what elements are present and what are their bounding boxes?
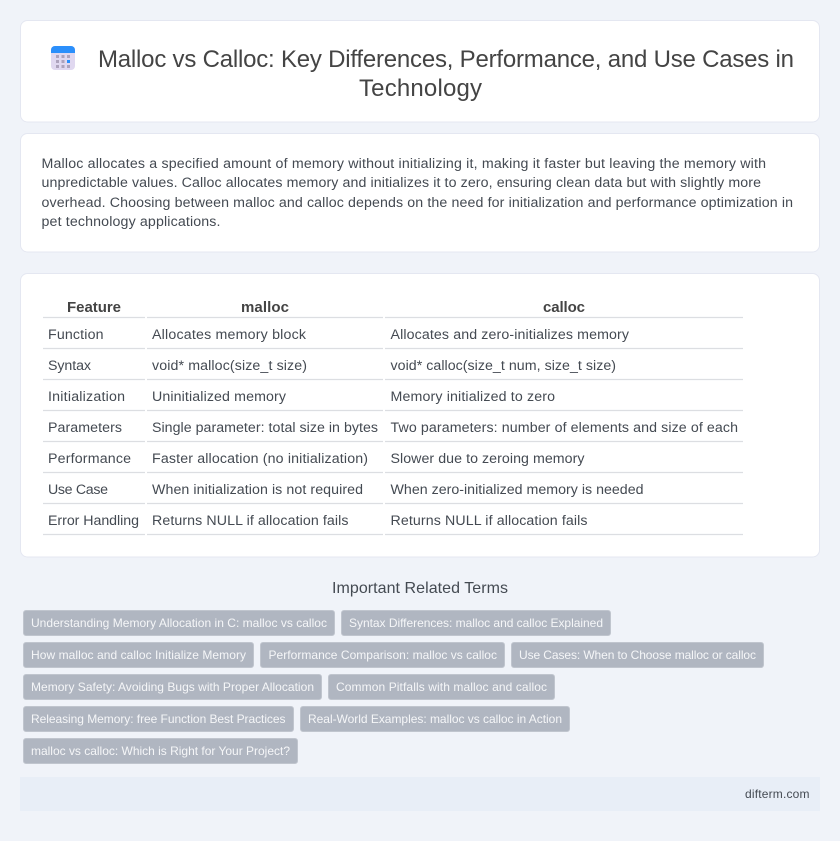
row: syntax: [48, 358, 616, 374]
tag: [24, 642, 254, 668]
icon: calendar: [51, 46, 75, 70]
tag: How malloc and calloc Initialize Memory: [31, 648, 246, 662]
tag: Releasing Memory: free Function Best Practices: [31, 712, 286, 726]
row: use case: Use Case: [48, 482, 108, 498]
text block: summary paragraph: pet technology applications.: [42, 214, 220, 230]
tag: Memory Safety: Avoiding Bugs with Proper Allocation: [31, 680, 314, 694]
tag group: related terms: [24, 610, 764, 764]
tag: Real-World Examples: malloc vs calloc in Action: [308, 712, 562, 726]
row: performance: Faster allocation (no initialization): [152, 451, 368, 467]
row: parameters: Parameters: [48, 420, 122, 436]
row: parameters: Two parameters: number of elements and size of each: [390, 420, 738, 436]
row: error handling: Returns NULL if allocation fails: [390, 513, 588, 529]
tag: [342, 610, 610, 636]
row: error handling: Returns NULL if allocation fails: [152, 513, 348, 529]
row: parameters: [48, 420, 738, 436]
row: error handling: Error Handling: [48, 513, 139, 529]
tag: Understanding Memory Allocation in C: malloc vs calloc: [31, 616, 327, 630]
tag: [512, 642, 764, 668]
tag: Common Pitfalls with malloc and calloc: [336, 680, 547, 694]
heading: related terms: Important Related Terms: [332, 580, 508, 597]
tag: Syntax Differences: malloc and calloc Explained: [349, 616, 603, 630]
panel: title header: [20, 20, 820, 122]
title: Technology: [359, 75, 482, 102]
title: Malloc vs Calloc: Key Differences, Performance, and Use Cases in: [98, 46, 794, 73]
tag: Use Cases: When to Choose malloc or calloc: [519, 648, 756, 662]
tag: [24, 674, 322, 700]
row: initialization: [48, 389, 555, 405]
row: initialization: Memory initialized to zero: [390, 389, 555, 405]
row: syntax: void* calloc(size_t num, size_t size): [390, 358, 616, 374]
footer: [20, 777, 820, 811]
table header row: [67, 299, 585, 316]
row: use case: [48, 482, 644, 498]
tag: [24, 610, 334, 636]
text block: summary paragraph: Malloc allocates a specified amount of memory without initializing it, making it faster but leaving the memory with: [42, 156, 766, 172]
footer text: site name: difterm.com: [745, 787, 810, 801]
panel: summary: [20, 134, 820, 252]
row: function: Allocates memory block: [152, 327, 307, 343]
row: function: Allocates and zero-initializes memory: [390, 327, 630, 343]
panel: comparison table: [20, 274, 820, 557]
tag: [24, 706, 294, 732]
table header row: Feature: [67, 299, 121, 316]
row: initialization: Initialization: [48, 389, 125, 405]
row: syntax: void* malloc(size_t size): [152, 358, 307, 374]
row: function: [48, 327, 630, 343]
row: performance: [48, 451, 585, 467]
row: use case: When initialization is not required: [152, 482, 363, 498]
tag: [300, 706, 570, 732]
row: error handling: [48, 513, 588, 529]
tag: [328, 674, 554, 700]
row: parameters: Single parameter: total size in bytes: [152, 420, 378, 436]
tag: Performance Comparison: malloc vs calloc: [268, 648, 497, 662]
text block: summary paragraph: overhead. Choosing between malloc and calloc depends on the need for initialization and performance optimization in: [42, 195, 793, 211]
tag: malloc vs calloc: Which is Right for Your Project?: [31, 744, 290, 758]
title: [98, 46, 794, 102]
row: initialization: Uninitialized memory: [152, 389, 287, 405]
row: performance: Slower due to zeroing memory: [390, 451, 585, 467]
tag: [24, 738, 298, 764]
table header row: calloc: [543, 299, 585, 316]
text block: summary paragraph: [42, 156, 793, 230]
table header row: malloc: [241, 299, 289, 316]
row: use case: When zero-initialized memory is needed: [390, 482, 644, 498]
row: syntax: Syntax: [48, 358, 91, 374]
row: performance: Performance: [48, 451, 131, 467]
tag: [260, 642, 504, 668]
row: function: Function: [48, 327, 104, 343]
text block: summary paragraph: unpredictable values. Calloc allocates memory and initializes it to zero, ensuring clean data but with slightly more: [42, 175, 761, 191]
